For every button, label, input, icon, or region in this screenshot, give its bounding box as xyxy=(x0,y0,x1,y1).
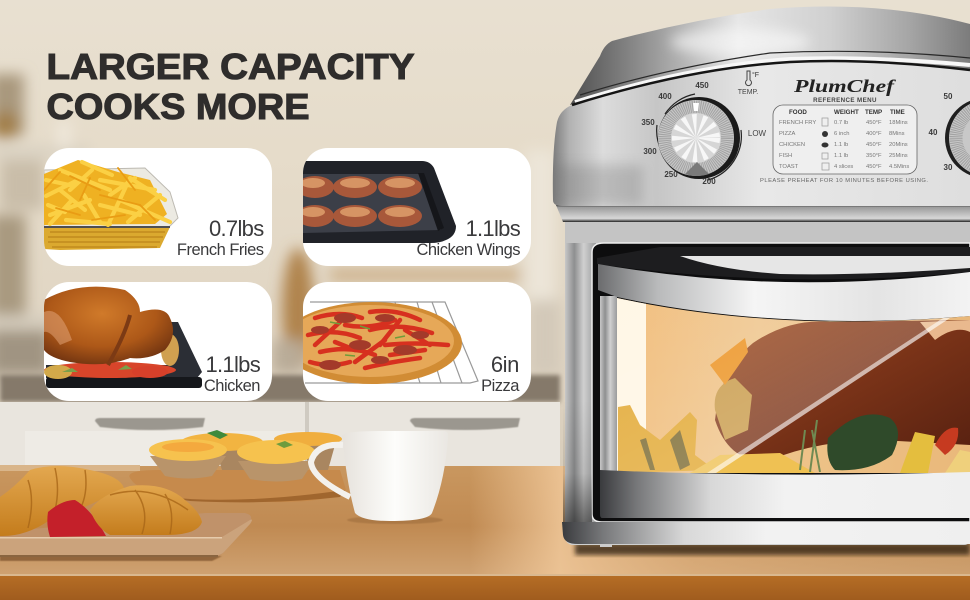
control fascia xyxy=(553,61,970,206)
oven base rim xyxy=(562,522,970,544)
preheat notice: PLEASE PREHEAT FOR 10 MINUTES BEFORE USING. xyxy=(760,178,928,184)
left temperature knob: 200 xyxy=(702,177,716,186)
title: larger capacity cooks more: LARGER CAPACITY xyxy=(46,46,414,87)
white food card: pizza xyxy=(282,282,531,401)
right timer knob xyxy=(929,92,970,178)
white food card: chicken xyxy=(44,282,272,401)
fascia lower-left shade xyxy=(553,165,643,206)
white food card: chicken wings xyxy=(296,148,531,266)
right timer knob: 50 xyxy=(944,92,953,101)
roast turkey xyxy=(715,320,970,460)
front tart right xyxy=(237,440,315,482)
label: 6in pizza: Pizza xyxy=(481,377,520,395)
label: 0.7lbs french fries xyxy=(177,216,264,259)
steel handle bar xyxy=(598,264,970,321)
label: 1.1lbs chicken wings xyxy=(416,216,521,259)
left temperature knob: 350 xyxy=(641,118,655,127)
tray shadow xyxy=(0,556,222,561)
left temperature knob xyxy=(641,81,767,186)
reference menu table: PIZZA xyxy=(779,131,796,137)
white food card: french fries xyxy=(44,148,272,266)
reference menu table: TEMP xyxy=(865,109,882,116)
reference menu table: 1.1 lb xyxy=(834,142,848,148)
wooden board xyxy=(129,470,346,502)
left temperature knob: 400 xyxy=(658,92,672,101)
label: 1.1lbs chicken wings: 1.1lbs xyxy=(465,216,521,241)
reference menu table: TIME xyxy=(890,109,905,116)
label: 6in pizza xyxy=(481,352,520,395)
oven top dome xyxy=(553,7,970,206)
oven shadow on table xyxy=(575,543,970,555)
reference menu table: WEIGHT xyxy=(834,109,859,116)
reference menu table: 400°F xyxy=(866,131,882,137)
left temperature knob: 300 xyxy=(643,147,657,156)
label: 1.1lbs chicken wings: Chicken Wings xyxy=(416,241,520,259)
oven door xyxy=(592,243,970,522)
label: 1.1lbs chicken: Chicken xyxy=(204,377,260,395)
reference menu table: 25Mins xyxy=(889,153,908,159)
wings xyxy=(296,176,422,227)
reference menu table: FISH xyxy=(779,153,792,159)
reference menu table: FOOD xyxy=(789,109,807,116)
label: 1.1lbs chicken xyxy=(204,352,261,395)
reference menu table: 20Mins xyxy=(889,142,908,148)
left croissant xyxy=(0,466,124,536)
food: egg tarts on wooden board xyxy=(129,430,346,502)
front tart left xyxy=(149,439,227,478)
reference menu table: 450°F xyxy=(866,120,882,126)
reference menu table: 8Mins xyxy=(889,131,905,137)
label: 0.7lbs french fries: 0.7lbs xyxy=(209,216,264,241)
strawberry xyxy=(47,500,106,537)
oven lower body xyxy=(565,205,970,545)
fries in foil pan xyxy=(44,160,178,250)
right timer knob: 40 xyxy=(929,128,938,137)
reference menu table: 350°F xyxy=(866,153,882,159)
temperature label: TEMP. xyxy=(738,89,758,96)
tray xyxy=(0,513,251,557)
back tart right xyxy=(274,432,342,470)
air fryer oven xyxy=(553,7,970,555)
PlumChef logo: PlumChef xyxy=(793,76,897,96)
countertop and cabinets background xyxy=(0,375,560,468)
label: 0.7lbs french fries: French Fries xyxy=(177,241,264,259)
lid xyxy=(570,7,970,105)
right timer knob: 30 xyxy=(944,163,953,172)
lower body top strip xyxy=(565,222,970,243)
label: 1.1lbs chicken: 1.1lbs xyxy=(205,352,261,377)
reference menu table: 4.5Mins xyxy=(889,164,909,170)
reference menu table: 4 slices xyxy=(834,164,853,170)
reference menu table: TOAST xyxy=(779,164,799,170)
lid highlight xyxy=(670,28,810,56)
temperature label xyxy=(738,71,759,96)
reference menu table: 6 inch xyxy=(834,131,849,137)
left temperature knob: LOW xyxy=(748,129,767,138)
wings on baking tray xyxy=(296,161,456,243)
title: larger capacity cooks more xyxy=(46,46,414,127)
reference menu table: FRENCH FRY xyxy=(779,120,816,126)
back tart xyxy=(181,430,263,470)
lower steel door panel xyxy=(600,470,970,518)
door handle xyxy=(597,247,970,279)
viewing window xyxy=(617,295,970,475)
reference menu heading: REFERENCE MENU xyxy=(813,97,877,104)
glass reflection xyxy=(617,295,950,473)
left temperature knob: 450 xyxy=(695,81,709,90)
oven foot xyxy=(600,544,612,547)
title: larger capacity cooks more: COOKS MORE xyxy=(46,86,310,127)
white coffee cup xyxy=(311,431,448,524)
steel band below control panel xyxy=(556,205,970,222)
reference menu table: 1.1 lb xyxy=(834,153,848,159)
left side lower shade xyxy=(563,400,592,522)
right croissant xyxy=(90,485,202,535)
reference menu table: CHICKEN xyxy=(779,142,805,148)
label: 6in pizza: 6in xyxy=(491,352,519,377)
roast chicken on tray xyxy=(44,287,202,388)
vegetables xyxy=(618,405,706,472)
temperature label: °F xyxy=(752,71,759,79)
pizza on wire rack xyxy=(282,302,478,384)
trim lines xyxy=(572,51,970,105)
reference menu table: 0.7 lb xyxy=(834,120,848,126)
wooden table xyxy=(0,465,970,600)
food: croissants on tray xyxy=(0,466,252,561)
reference menu table: 18Mins xyxy=(889,120,908,126)
left temperature knob: 250 xyxy=(664,170,678,179)
reference menu table: 450°F xyxy=(866,164,882,170)
reference menu table xyxy=(773,105,917,174)
reference menu table: 450°F xyxy=(866,142,882,148)
